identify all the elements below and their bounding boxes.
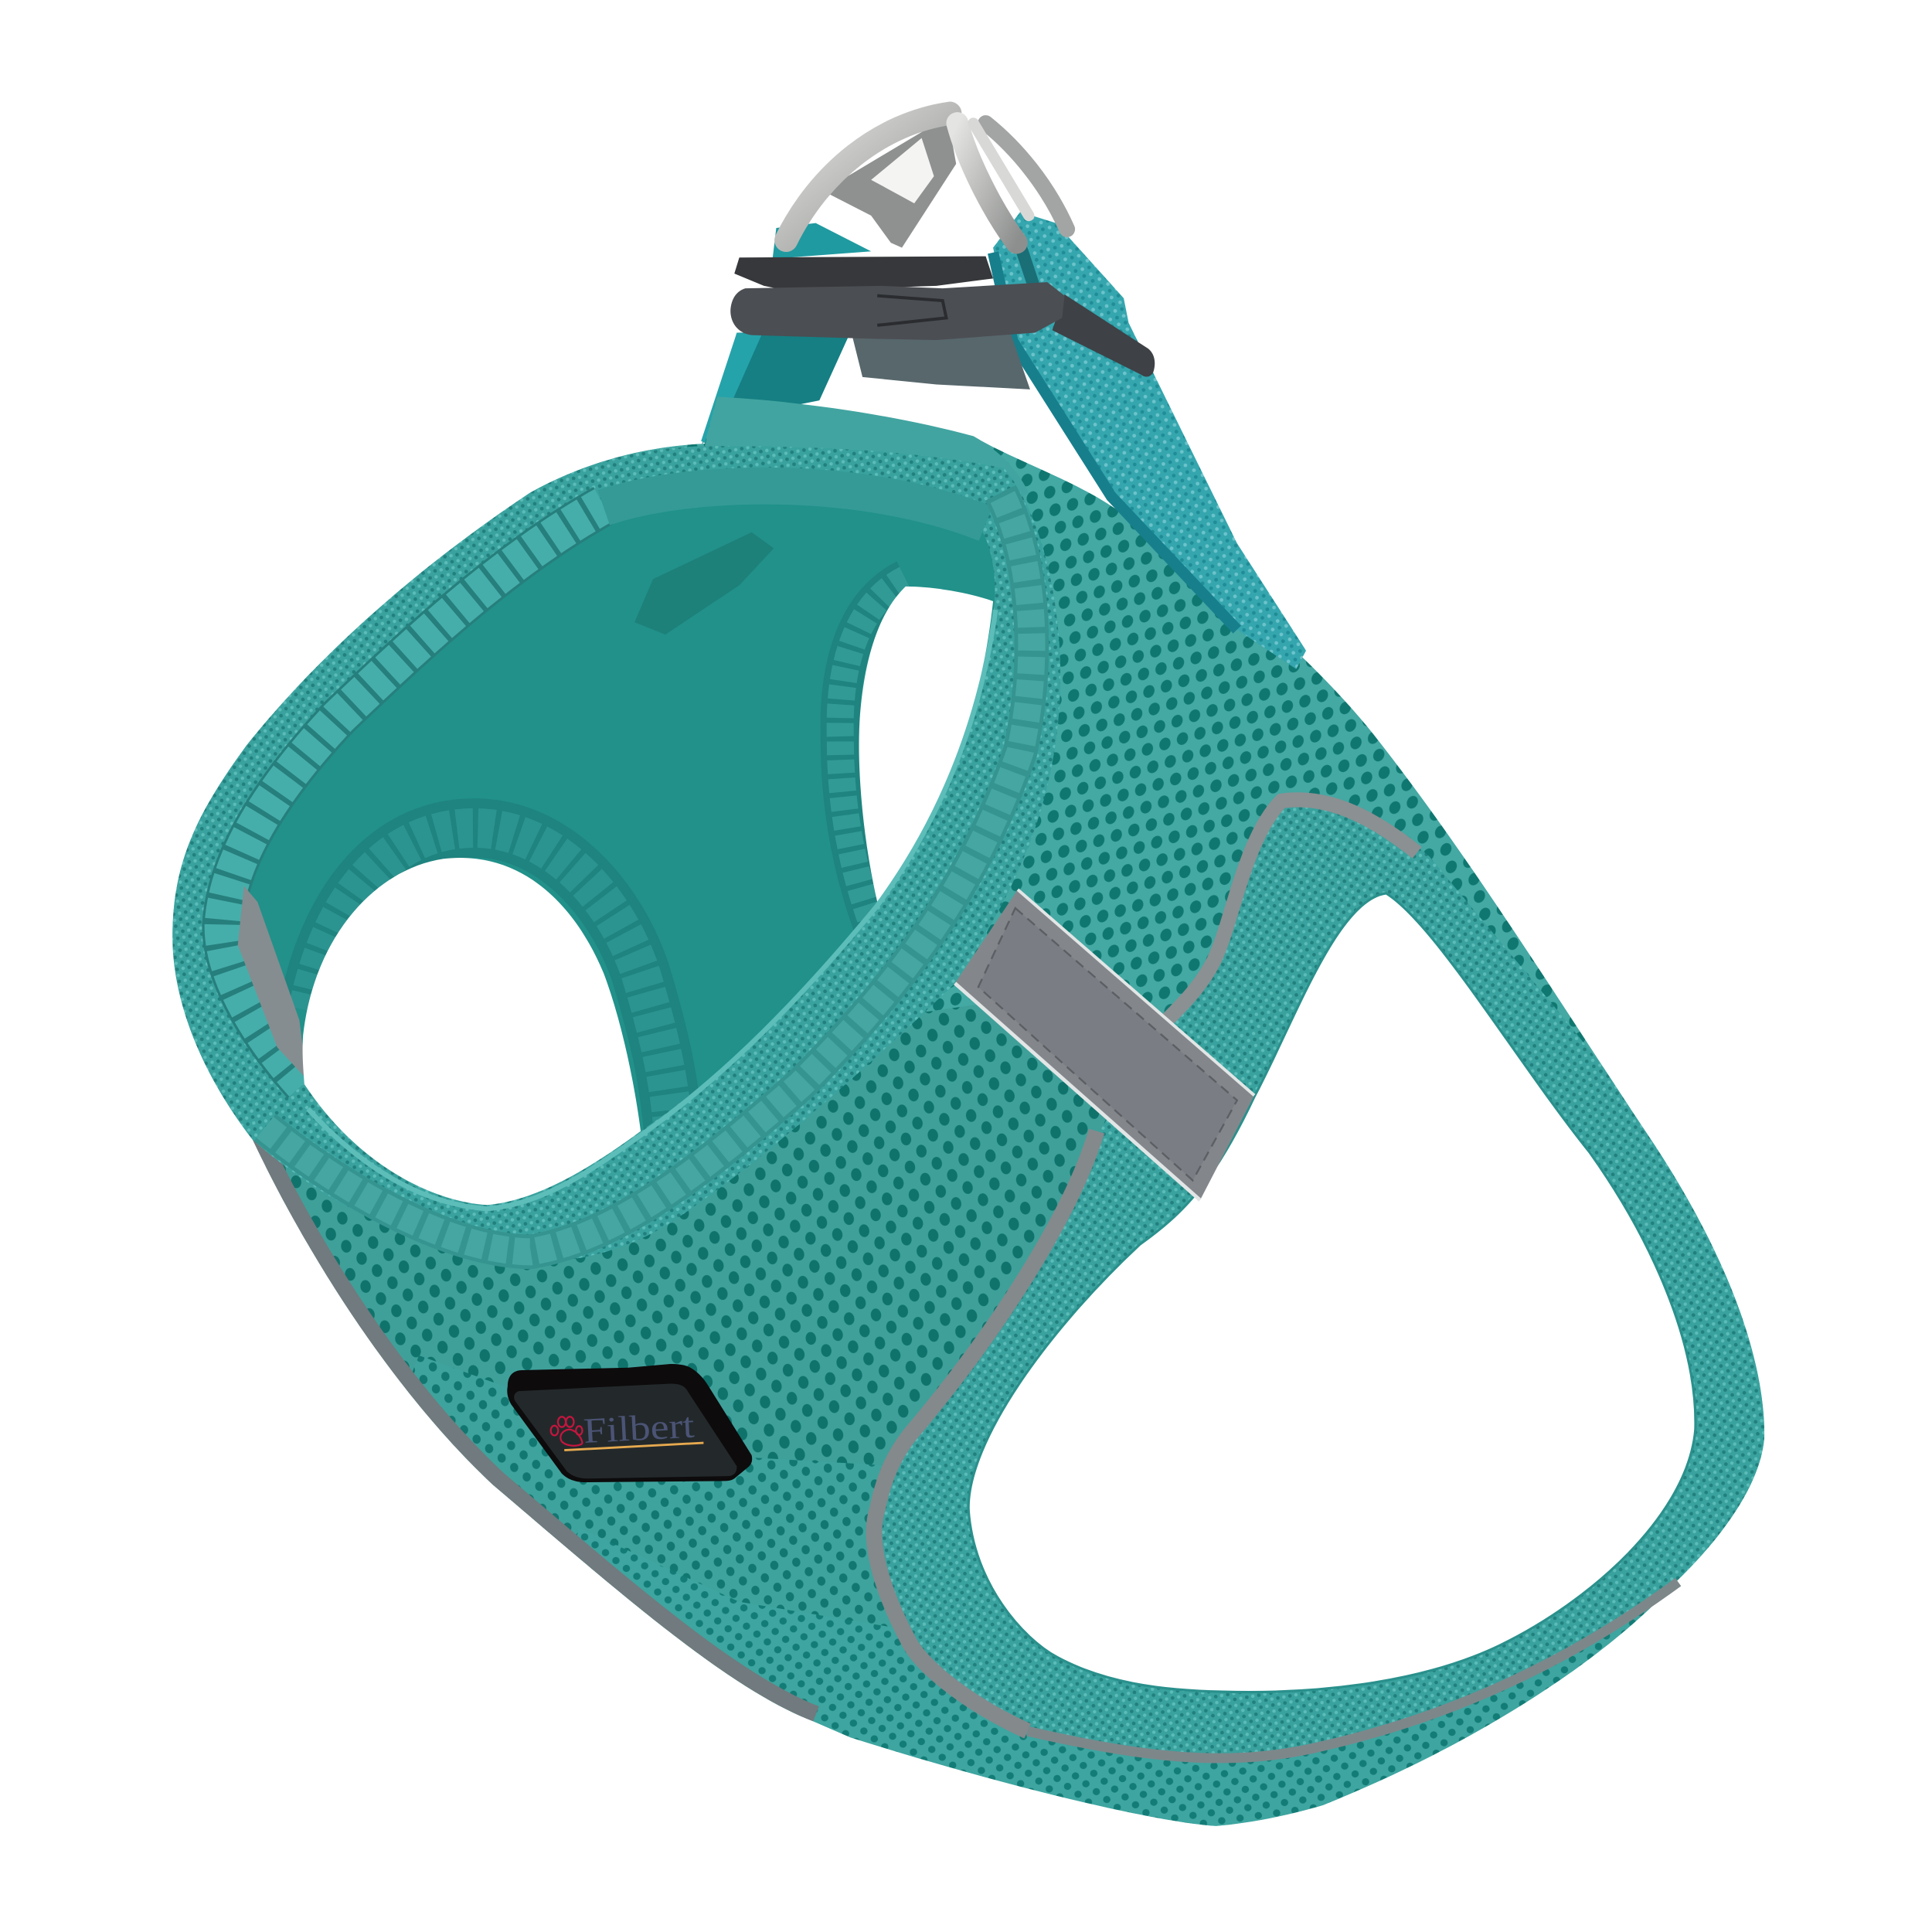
inner reflective strip [238,886,307,1080]
top loop band [705,396,1029,518]
mesh body of the harness [172,396,1774,1849]
illustration: teal mesh dog harness [172,102,1765,1826]
binding around leg opening [874,798,1774,1758]
reflective trim along lower edge [253,1140,813,1721]
brand badge [507,1364,752,1482]
left webbing strap behind buckle [701,223,871,446]
front rim braid detail [265,493,1032,1252]
metal D-rings [786,114,1067,247]
lower reflective piping [874,1131,1679,1758]
opening: lower chest hole [303,858,641,1205]
opening: leg hole [968,893,1696,1692]
outer binding ring [172,446,1060,1261]
brand name: Filbert [583,1406,696,1451]
binding around lower inner opening [308,828,675,1158]
right webbing strap [993,212,1306,669]
inner lining [243,489,995,1205]
grey reflective piping [1165,800,1417,1022]
paw icon [551,1417,583,1446]
opening: upper chest hole [859,587,993,902]
reflective tab [955,889,1254,1200]
underline [564,1443,703,1451]
sewn-in label on lining [634,532,774,634]
buckle [730,257,1155,389]
scalloped binding on upper left rim [223,486,986,1084]
binding around upper inner opening [840,579,906,924]
